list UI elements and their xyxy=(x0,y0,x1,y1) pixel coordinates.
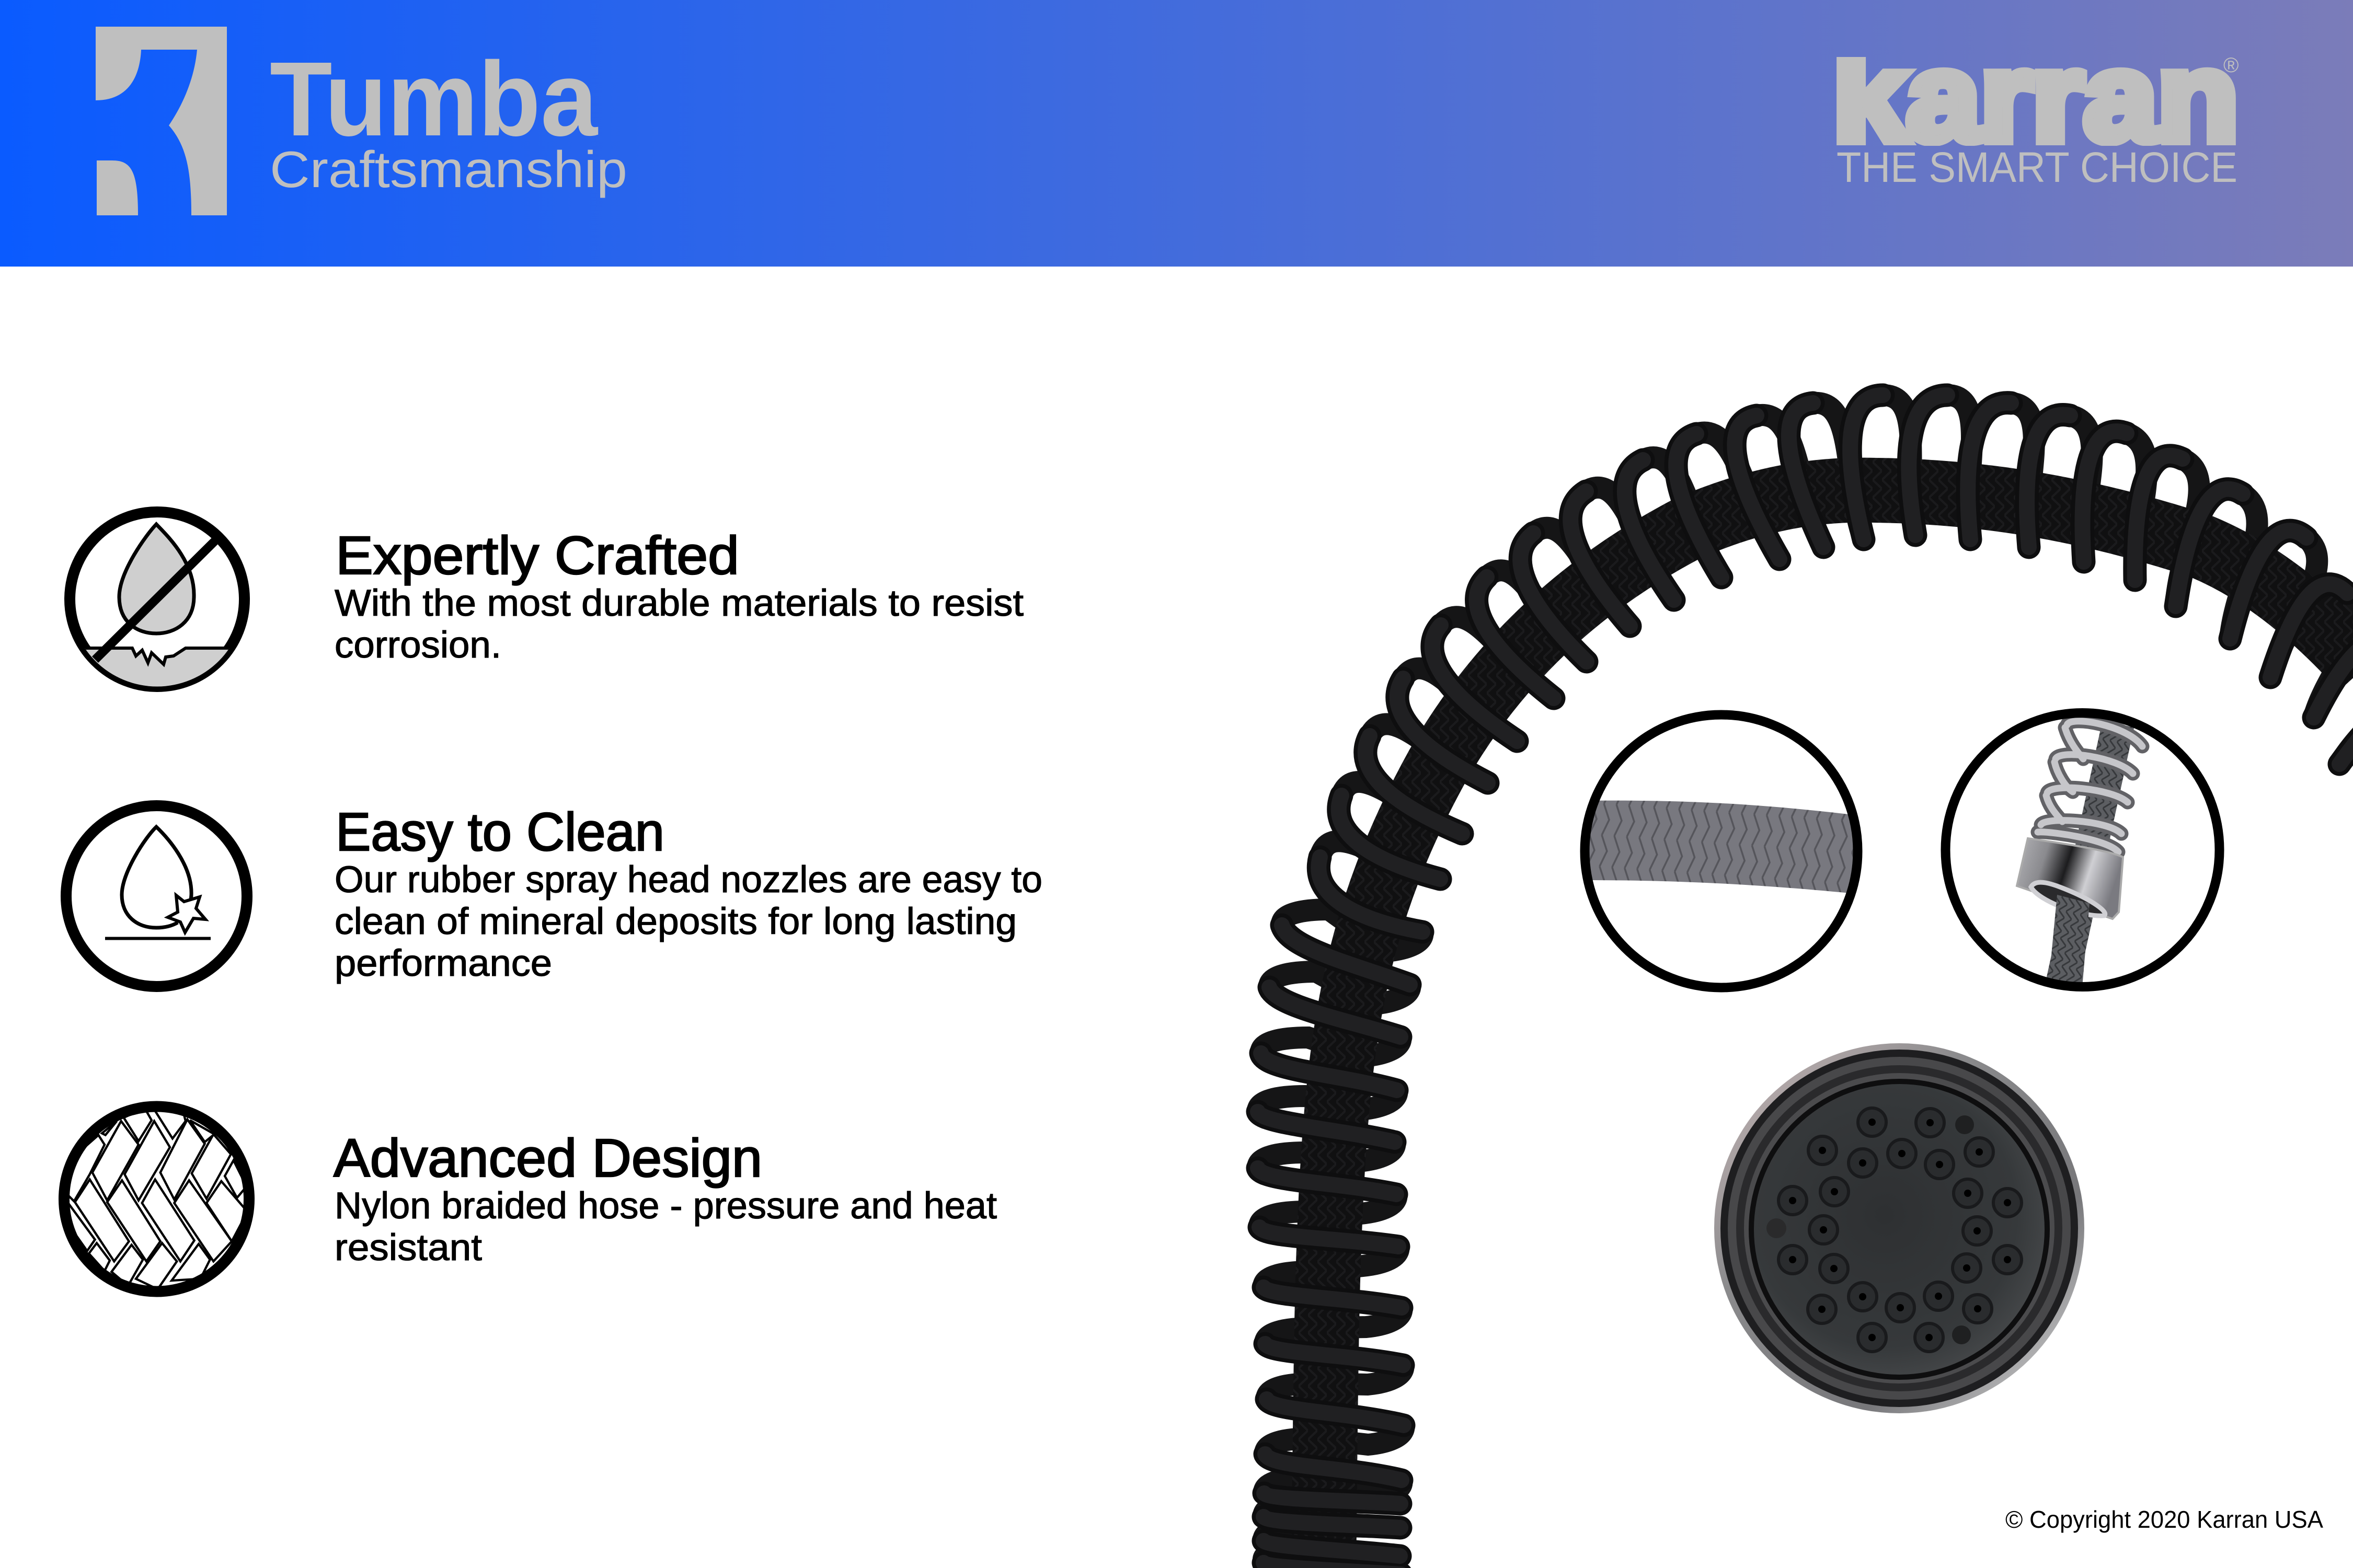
inset: braided hose detail xyxy=(1579,715,1866,988)
text block: Easy to Clean body: clean of mineral deposits for long lasting xyxy=(335,901,1017,942)
header band xyxy=(0,0,2353,267)
logo: karran: ® xyxy=(2223,54,2239,77)
icon: no corrosion drop xyxy=(63,512,251,700)
text block: Easy to Clean body: Our rubber spray head nozzles are easy to xyxy=(335,859,1042,901)
icon: easy clean drop xyxy=(66,806,247,987)
text block: Expertly Crafted body: With the most durable materials to resist xyxy=(335,583,1024,624)
text block: Expertly Crafted body xyxy=(335,583,1024,666)
logo: karran: karran xyxy=(1833,27,2239,167)
rubber nozzles xyxy=(1766,1108,2022,1352)
inset: chrome spring collar xyxy=(1946,713,2220,993)
heading: Tumba Craftsmanship: Craftsmanship xyxy=(270,141,627,198)
text block: Advanced Design body: Nylon braided hose - pressure and heat xyxy=(335,1185,997,1227)
text block: Advanced Design body xyxy=(335,1185,997,1269)
logo: karran: THE SMART CHOICE xyxy=(1837,144,2237,191)
braided hose xyxy=(1324,490,2353,1568)
icon: braided hose weave xyxy=(64,1106,249,1292)
text block: Expertly Crafted body: corrosion. xyxy=(335,625,501,666)
product photo: coiled black hose xyxy=(1258,395,2353,1568)
heading: Expertly Crafted: Expertly Crafted xyxy=(336,525,739,585)
text block: Easy to Clean body: performance xyxy=(335,943,552,984)
text block: Easy to Clean body xyxy=(335,859,1042,984)
coil back strands xyxy=(1258,395,2353,1560)
heading: Advanced Design: Advanced Design xyxy=(334,1128,762,1188)
heading: Easy to Clean: Easy to Clean xyxy=(336,802,664,862)
heading: Tumba Craftsmanship: Tumba xyxy=(270,40,599,158)
logo: Tumba mark xyxy=(96,27,227,215)
inset: spray head nozzle face xyxy=(1714,1043,2084,1413)
copyright note: © Copyright 2020 Karran USA xyxy=(2005,1506,2323,1533)
logo: karran xyxy=(1837,57,2239,182)
text block: Advanced Design body: resistant xyxy=(335,1227,482,1269)
coil front strands xyxy=(1258,395,2353,1568)
